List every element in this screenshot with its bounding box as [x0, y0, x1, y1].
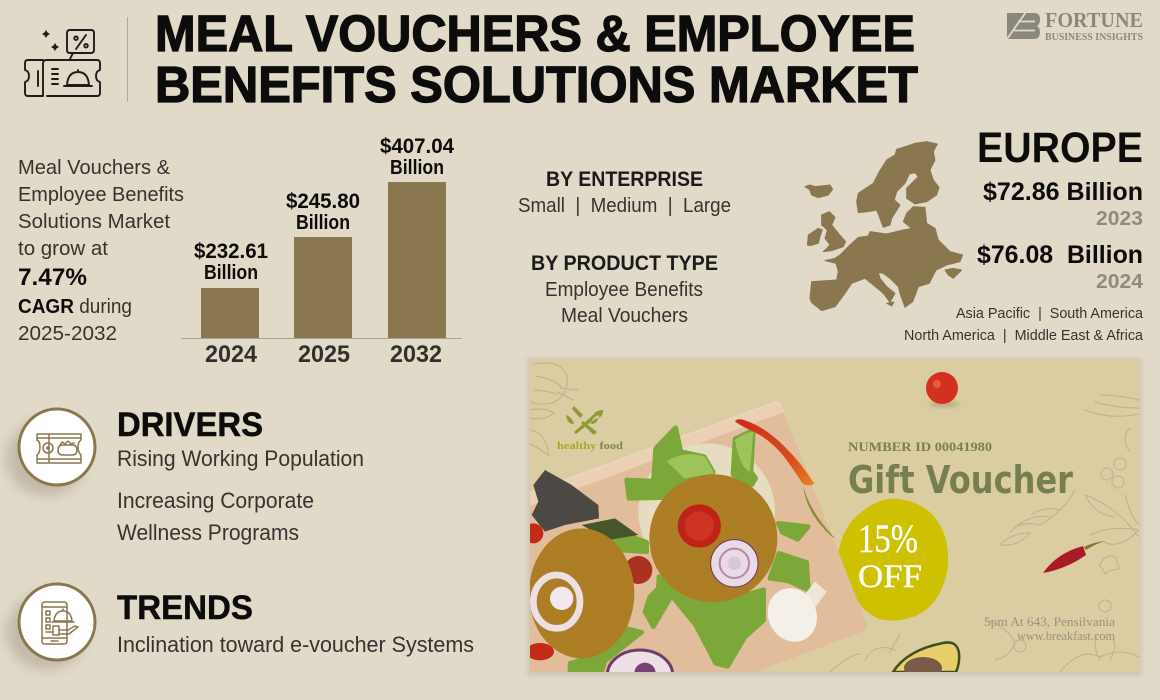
bar: 2024: $232.61 — [194, 240, 268, 263]
chili stem — [803, 487, 835, 538]
segments: by product type: BY PRODUCT TYPE — [531, 252, 718, 275]
text block: market growth: Solutions Market — [18, 211, 170, 233]
text block: drivers: Wellness Programs — [117, 520, 299, 545]
discount blob — [838, 498, 948, 620]
bar: 2024: Billion — [204, 262, 258, 284]
bar: 2024 — [194, 240, 268, 368]
logo: Fortune Business Insights: BUSINESS INSIGHTS — [1045, 31, 1143, 43]
logo: healthy food: healthy food — [557, 441, 624, 452]
icon: drivers voucher badge — [6, 409, 95, 496]
bar: 2025: Billion — [296, 212, 350, 234]
segments: by enterprise: Small | Medium | Large — [518, 195, 731, 217]
tomatoes behind — [628, 556, 652, 584]
onion left — [533, 575, 580, 628]
title: BENEFITS SOLUTIONS MARKET — [155, 56, 918, 113]
text block: trends — [117, 589, 474, 657]
voucher number: NUMBER ID 00041980 — [848, 439, 992, 454]
text block: drivers: Increasing Corporate — [117, 488, 314, 513]
gift voucher heading: Gift Voucher — [848, 458, 1073, 502]
text block: drivers: Rising Working Population — [117, 446, 364, 471]
icon: trends mobile ordering badge — [6, 584, 95, 670]
bar chart — [181, 135, 462, 368]
tomato slice — [678, 504, 721, 548]
bar: 2032 — [380, 135, 454, 368]
region: Europe figures: $72.86 Billion — [983, 178, 1143, 206]
right patty — [649, 474, 777, 602]
burger and garnish artwork — [530, 419, 835, 672]
mushroom — [805, 582, 826, 608]
dark leaves — [532, 470, 599, 532]
other regions: North America | Middle East & Africa — [904, 327, 1144, 344]
address text — [984, 618, 1115, 640]
text block: market growth: 7.47% — [18, 264, 87, 291]
text block: trends: TRENDS — [117, 589, 253, 627]
bar: 2032: Billion — [390, 157, 444, 179]
text block: drivers — [117, 406, 364, 545]
other regions — [904, 305, 1144, 344]
logo: Fortune Business Insights — [1007, 8, 1143, 43]
red chili — [735, 419, 814, 485]
segments: by enterprise — [518, 168, 731, 217]
left patty — [529, 528, 634, 658]
bar: 2032: $407.04 — [380, 135, 454, 158]
discount text: OFF — [858, 559, 922, 595]
text block: trends: Inclination toward e-voucher Systems — [117, 632, 474, 657]
title — [155, 5, 918, 113]
address text: www.breakfast.com — [1017, 628, 1115, 643]
discount text — [859, 525, 921, 588]
cutting board — [530, 403, 868, 672]
bar: 2025: $245.80 — [286, 190, 360, 213]
bar: 2024: 2024 — [205, 341, 258, 368]
logo: Fortune Business Insights: FORTUNE — [1045, 8, 1143, 32]
discount text: 15% — [858, 516, 918, 561]
onion bottom — [606, 648, 674, 672]
bar: 2025: 2025 — [298, 341, 350, 368]
map: Europe — [805, 142, 963, 311]
panel: gift voucher photo — [523, 358, 1142, 700]
text block: market growth: CAGR during — [18, 296, 132, 318]
text block: market growth: 2025-2032 — [18, 323, 117, 345]
text block: market growth — [18, 157, 184, 345]
red chili small — [1043, 541, 1105, 573]
address text: 5pm At 643, Pensilvania — [984, 614, 1115, 629]
onion right — [711, 540, 758, 587]
bun — [638, 444, 775, 550]
tomato — [929, 401, 959, 407]
avocado — [892, 641, 960, 672]
segments: by product type: Employee Benefits — [545, 279, 703, 301]
text block: drivers: DRIVERS — [117, 406, 263, 444]
title: MEAL VOUCHERS & EMPLOYEE — [155, 5, 915, 62]
segments: by product type — [531, 252, 718, 327]
text block: market growth: to grow at — [18, 238, 108, 260]
region: Europe figures: 2023 — [1096, 208, 1143, 230]
segments: by enterprise: BY ENTERPRISE — [546, 168, 703, 191]
region: Europe figures: EUROPE — [977, 124, 1143, 172]
region: Europe figures: $76.08 Billion — [977, 241, 1143, 269]
lettuce — [570, 428, 808, 670]
region: Europe figures — [977, 124, 1144, 293]
icon: meal voucher ticket — [25, 30, 100, 96]
text block: market growth: Employee Benefits — [18, 184, 184, 206]
bar: 2032: 2032 — [390, 341, 442, 368]
text block: market growth: Meal Vouchers & — [18, 157, 171, 179]
bar: 2025 — [286, 190, 360, 368]
logo: healthy food — [557, 406, 624, 452]
other regions: Asia Pacific | South America — [956, 305, 1144, 322]
segments: by product type: Meal Vouchers — [561, 305, 688, 327]
region: Europe figures: 2024 — [1096, 271, 1144, 293]
